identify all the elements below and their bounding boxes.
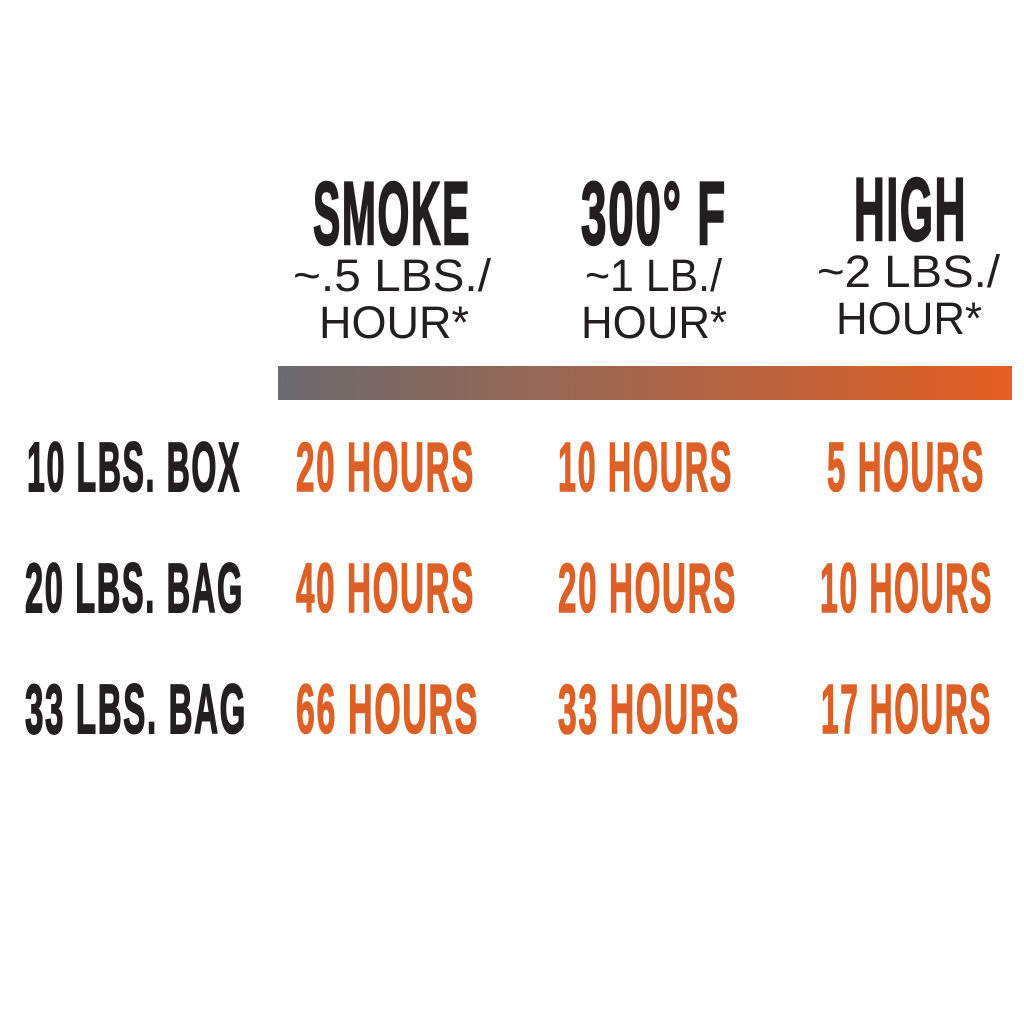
row: 33 lbs bag: 33 HOURS xyxy=(558,670,740,748)
column header: 300 F setting xyxy=(581,163,727,348)
heading: 300 F: 300° F xyxy=(581,163,727,263)
column header: smoke setting: SMOKE xyxy=(313,163,471,263)
row: 20 lbs bag: 20 HOURS xyxy=(558,549,737,627)
row: 10 lbs box xyxy=(27,428,985,506)
column header: smoke setting xyxy=(293,163,492,348)
row: 20 lbs bag xyxy=(25,549,993,627)
smoke rate line 1: ~.5 LBS./ xyxy=(293,250,492,301)
300 F rate line 2: HOUR* xyxy=(581,297,727,348)
row: 33 lbs bag: 66 HOURS xyxy=(296,670,479,748)
row: 10 lbs box: 10 HOURS xyxy=(558,428,733,506)
row: 33 lbs bag xyxy=(25,670,992,748)
row: 10 lbs box: 10 LBS. BOX xyxy=(27,428,241,506)
row: 20 lbs bag: 20 LBS. BAG xyxy=(25,549,244,627)
smoke rate line 2: HOUR* xyxy=(319,297,469,348)
high rate line 1: ~2 LBS./ xyxy=(817,246,1001,297)
row: 33 lbs bag: 33 LBS. BAG xyxy=(25,670,247,748)
row: 10 lbs box: 20 HOURS xyxy=(296,428,475,506)
300 F rate line 1: ~1 LB./ xyxy=(585,250,722,301)
column header: high setting xyxy=(817,159,1001,344)
gradient bar xyxy=(278,366,1012,400)
high rate line 2: HOUR* xyxy=(836,293,982,344)
row: 20 lbs bag: 40 HOURS xyxy=(296,549,475,627)
